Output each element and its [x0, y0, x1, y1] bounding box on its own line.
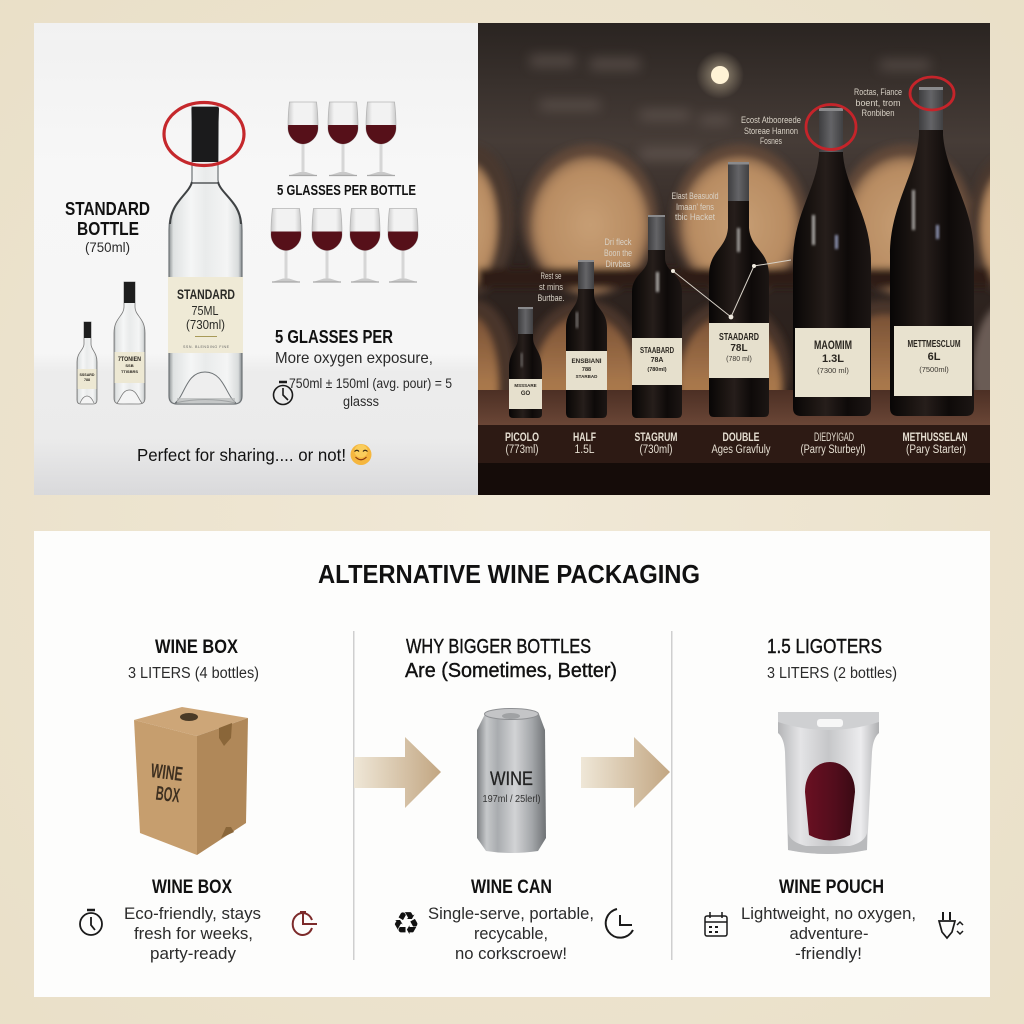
column one footer: fresh for weeks,: [134, 925, 253, 943]
callout: double: [742, 116, 801, 144]
text block: glasses detail: More oxygen exposure,: [275, 350, 433, 367]
illustration: wine box: WINE: [150, 760, 184, 786]
cellar background barrels: [478, 142, 990, 390]
column one footer: party-ready: [150, 945, 237, 963]
callout: stagnum: tbic Hacket: [675, 212, 715, 222]
bottle: magnum: (7300 ml): [817, 366, 849, 375]
text block: glasses detail: 5 GLASSES PER: [275, 326, 393, 347]
bottle: double: 78L: [730, 343, 748, 354]
small bottle: 788: [84, 378, 90, 382]
callout: stagnum: Imaan' fens: [676, 202, 714, 212]
bottle: magnum: MAOMIM: [814, 340, 852, 352]
illustration: wine can: [477, 708, 546, 853]
callout: magnum: Ronbiben: [862, 108, 894, 118]
bottle: stagnum: STAABARD: [640, 346, 674, 355]
callout: piccolo: [538, 272, 564, 301]
column two footer: Single-serve, portable,: [428, 905, 594, 923]
column two footer: [428, 876, 594, 963]
bottle: half: 788: [582, 367, 591, 373]
callout: piccolo: Rest se: [540, 271, 562, 281]
panel: standard bottle: [34, 23, 478, 495]
callout: magnum: boent, trom: [856, 98, 900, 108]
callout: double: Ecost Atbooreede: [741, 115, 801, 125]
bottle: half: [566, 260, 607, 418]
illustration: wine box: BOX: [154, 783, 181, 807]
icon: calendar: [705, 912, 727, 936]
text block: glasses detail: [275, 326, 452, 409]
bottle: piccolo: [509, 307, 542, 418]
icon row: wine glasses bottom: [271, 208, 418, 282]
heading: standard bottle: BOTTLE: [77, 218, 139, 239]
small bottle: SSSARD: [80, 373, 95, 377]
column three footer: WINE POUCH: [779, 876, 884, 898]
small bottle: [77, 322, 97, 404]
callout: half: [604, 238, 632, 267]
shelf labels: (Parry Sturbeyl): [800, 444, 866, 456]
column one footer: Eco-friendly, stays: [124, 905, 261, 923]
bottle: double: STAADARD: [719, 332, 759, 343]
callout: stagnum: Elast Beasuold: [672, 191, 718, 201]
shelf labels: DOUBLE: [722, 432, 760, 444]
column one header: 3 LITERS (4 bottles): [128, 665, 259, 682]
column three header: [767, 636, 897, 682]
callout: half: Dirvbas: [606, 259, 631, 269]
column three footer: Lightweight, no oxygen,: [741, 905, 916, 923]
icon: plug: [939, 912, 963, 938]
column two footer: WINE CAN: [471, 876, 552, 898]
title: ALTERNATIVE WINE PACKAGING: [318, 559, 700, 589]
bottle: methuselah: [890, 87, 974, 416]
column three header: 3 LITERS (2 bottles): [767, 665, 897, 682]
icon: red timer: [293, 912, 317, 935]
icon: recycle: ♻: [392, 906, 420, 942]
medium bottle: TTISBRS: [121, 369, 138, 374]
heading: standard bottle: STANDARD: [65, 198, 150, 219]
medium bottle: SSB: [125, 363, 134, 368]
bottle: double: (780 ml): [726, 356, 752, 363]
bottle label: 75ML: [192, 303, 218, 318]
heading: standard bottle: (750ml): [85, 239, 130, 255]
bottle label: STANDARD: [177, 286, 235, 302]
shelf labels: HALF: [573, 432, 596, 444]
icon: clock arc: [606, 909, 633, 938]
medium bottle: [114, 282, 145, 404]
column two footer: no corkscroew!: [455, 945, 567, 963]
callout: double: Fosnes: [760, 136, 782, 146]
callout: half: Dri fleck: [604, 237, 632, 247]
callout: magnum: Roctas, Fiance: [854, 87, 902, 97]
bottle: magnum: 1.3L: [822, 353, 844, 365]
medium bottle: 7TONIEN: [118, 357, 141, 363]
caption: perfect for sharing: Perfect for sharing.... or not!: [137, 445, 346, 465]
arrow one: [354, 737, 441, 808]
panel: bottle size lineup: [478, 23, 990, 495]
callout ring: main bottle closure: [164, 102, 244, 166]
column two header: WHY BIGGER BOTTLES: [406, 636, 591, 658]
column two header: [405, 636, 617, 682]
callout: half: Boon the: [604, 248, 632, 258]
bottle: magnum: [793, 108, 871, 416]
shelf labels: METHUSSELAN: [902, 432, 968, 444]
shelf labels: [505, 432, 968, 456]
column three footer: [741, 876, 916, 963]
column one header: WINE BOX: [155, 636, 238, 658]
illustration: wine can: WINE: [490, 768, 533, 790]
bottle: stagnum: [632, 215, 682, 418]
shelf labels: PICOLO: [505, 432, 539, 444]
shelf labels: (Pary Starter): [906, 444, 966, 456]
text block: glasses detail: 750ml ± 150ml (avg. pour) = 5: [289, 376, 452, 391]
callout: piccolo: st mins: [539, 282, 563, 292]
bottle label: (730ml): [186, 317, 225, 332]
column three footer: adventure-: [790, 925, 868, 943]
column two footer: recycable,: [474, 925, 548, 943]
column one header: [128, 636, 259, 682]
callout: double: Storeae Hannon: [744, 126, 798, 136]
label: glasses per bottle: 5 GLASSES PER BOTTLE: [277, 183, 416, 199]
bottle: stagnum: (780ml): [647, 367, 667, 373]
heading: standard bottle: [65, 198, 150, 255]
callout: piccolo: Burtbae.: [538, 293, 564, 303]
bottle: methuselah: METTMESCLUM: [908, 338, 961, 350]
icon: smiling emoji: [350, 444, 372, 465]
column one footer: WINE BOX: [152, 876, 232, 898]
column one footer: [124, 876, 261, 963]
bottle: stagnum: 78A: [651, 357, 663, 364]
main bottle: [168, 107, 243, 404]
bottle: double: [709, 162, 769, 417]
shelf labels: (730ml): [640, 444, 673, 456]
illustration: wine pouch: [778, 712, 879, 854]
icon: stopwatch: [80, 910, 102, 935]
column dividers: [353, 631, 672, 960]
bottle label: SSN. BLENDING FINE: [183, 345, 230, 349]
ceiling light: [698, 53, 742, 97]
icon: stopwatch: [274, 382, 292, 404]
bottle: methuselah: (7500ml): [919, 365, 949, 374]
text block: glasses detail: glasss: [343, 394, 379, 409]
callout rings: magnum and methuselah: [806, 77, 954, 150]
shelf labels: Ages Gravfuly: [712, 444, 771, 456]
bottle: half: STARBAD: [576, 374, 598, 379]
arrow two: [581, 737, 670, 808]
shelf labels: DIEDYIGAD: [814, 432, 854, 444]
callout: magnum: [854, 88, 902, 116]
bottle: half: ENSBIANI: [572, 358, 602, 365]
column two header: Are (Sometimes, Better): [405, 660, 617, 682]
shelf labels: STAGRUM: [634, 432, 678, 444]
callout: stagnum: [672, 192, 718, 220]
illustration: wine can: 197ml / 25lerl): [482, 794, 540, 805]
bottle label: [168, 277, 243, 353]
bottle: piccolo: MSSSARE: [514, 383, 537, 388]
illustration: wine box: [134, 707, 248, 855]
bottle: piccolo: GO: [521, 391, 530, 397]
shelf labels: 1.5L: [574, 444, 595, 456]
column three footer: -friendly!: [795, 945, 862, 963]
connector lines: [671, 260, 791, 319]
shelf labels: (773ml): [506, 444, 539, 456]
blurred brick wall: [530, 55, 930, 160]
wooden shelf: [478, 390, 990, 495]
bottle: methuselah: 6L: [928, 351, 941, 363]
column three header: 1.5 LIGOTERS: [767, 636, 882, 658]
icon row: wine glasses top: [288, 102, 396, 176]
panel: alternative wine packaging: [34, 531, 990, 997]
